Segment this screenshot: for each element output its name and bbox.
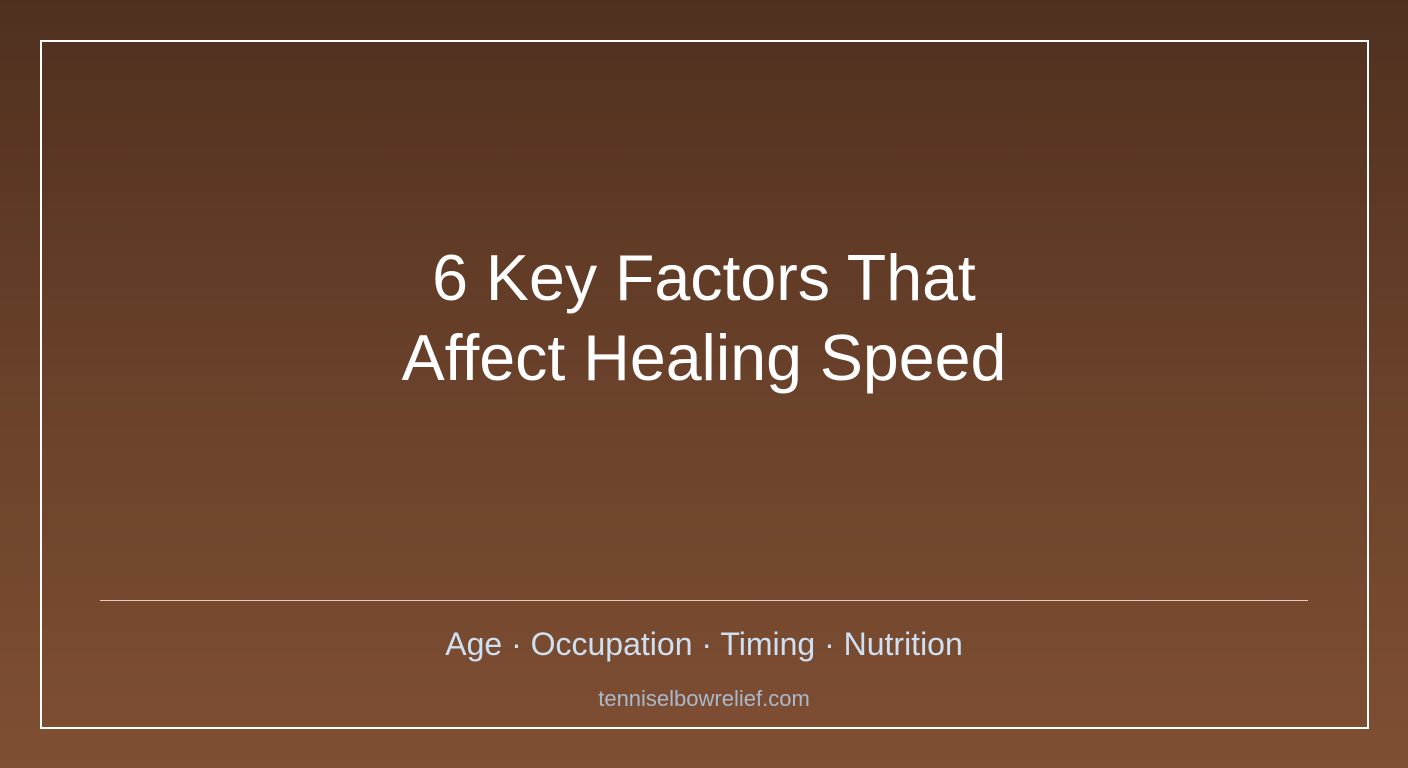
website url: tenniselbowrelief.com xyxy=(598,686,810,711)
title xyxy=(402,242,1006,394)
title: Affect Healing Speed xyxy=(402,322,1006,394)
divider line xyxy=(100,600,1308,601)
subtitle: Age · Occupation · Timing · Nutrition xyxy=(445,626,963,662)
title: 6 Key Factors That xyxy=(432,242,976,314)
